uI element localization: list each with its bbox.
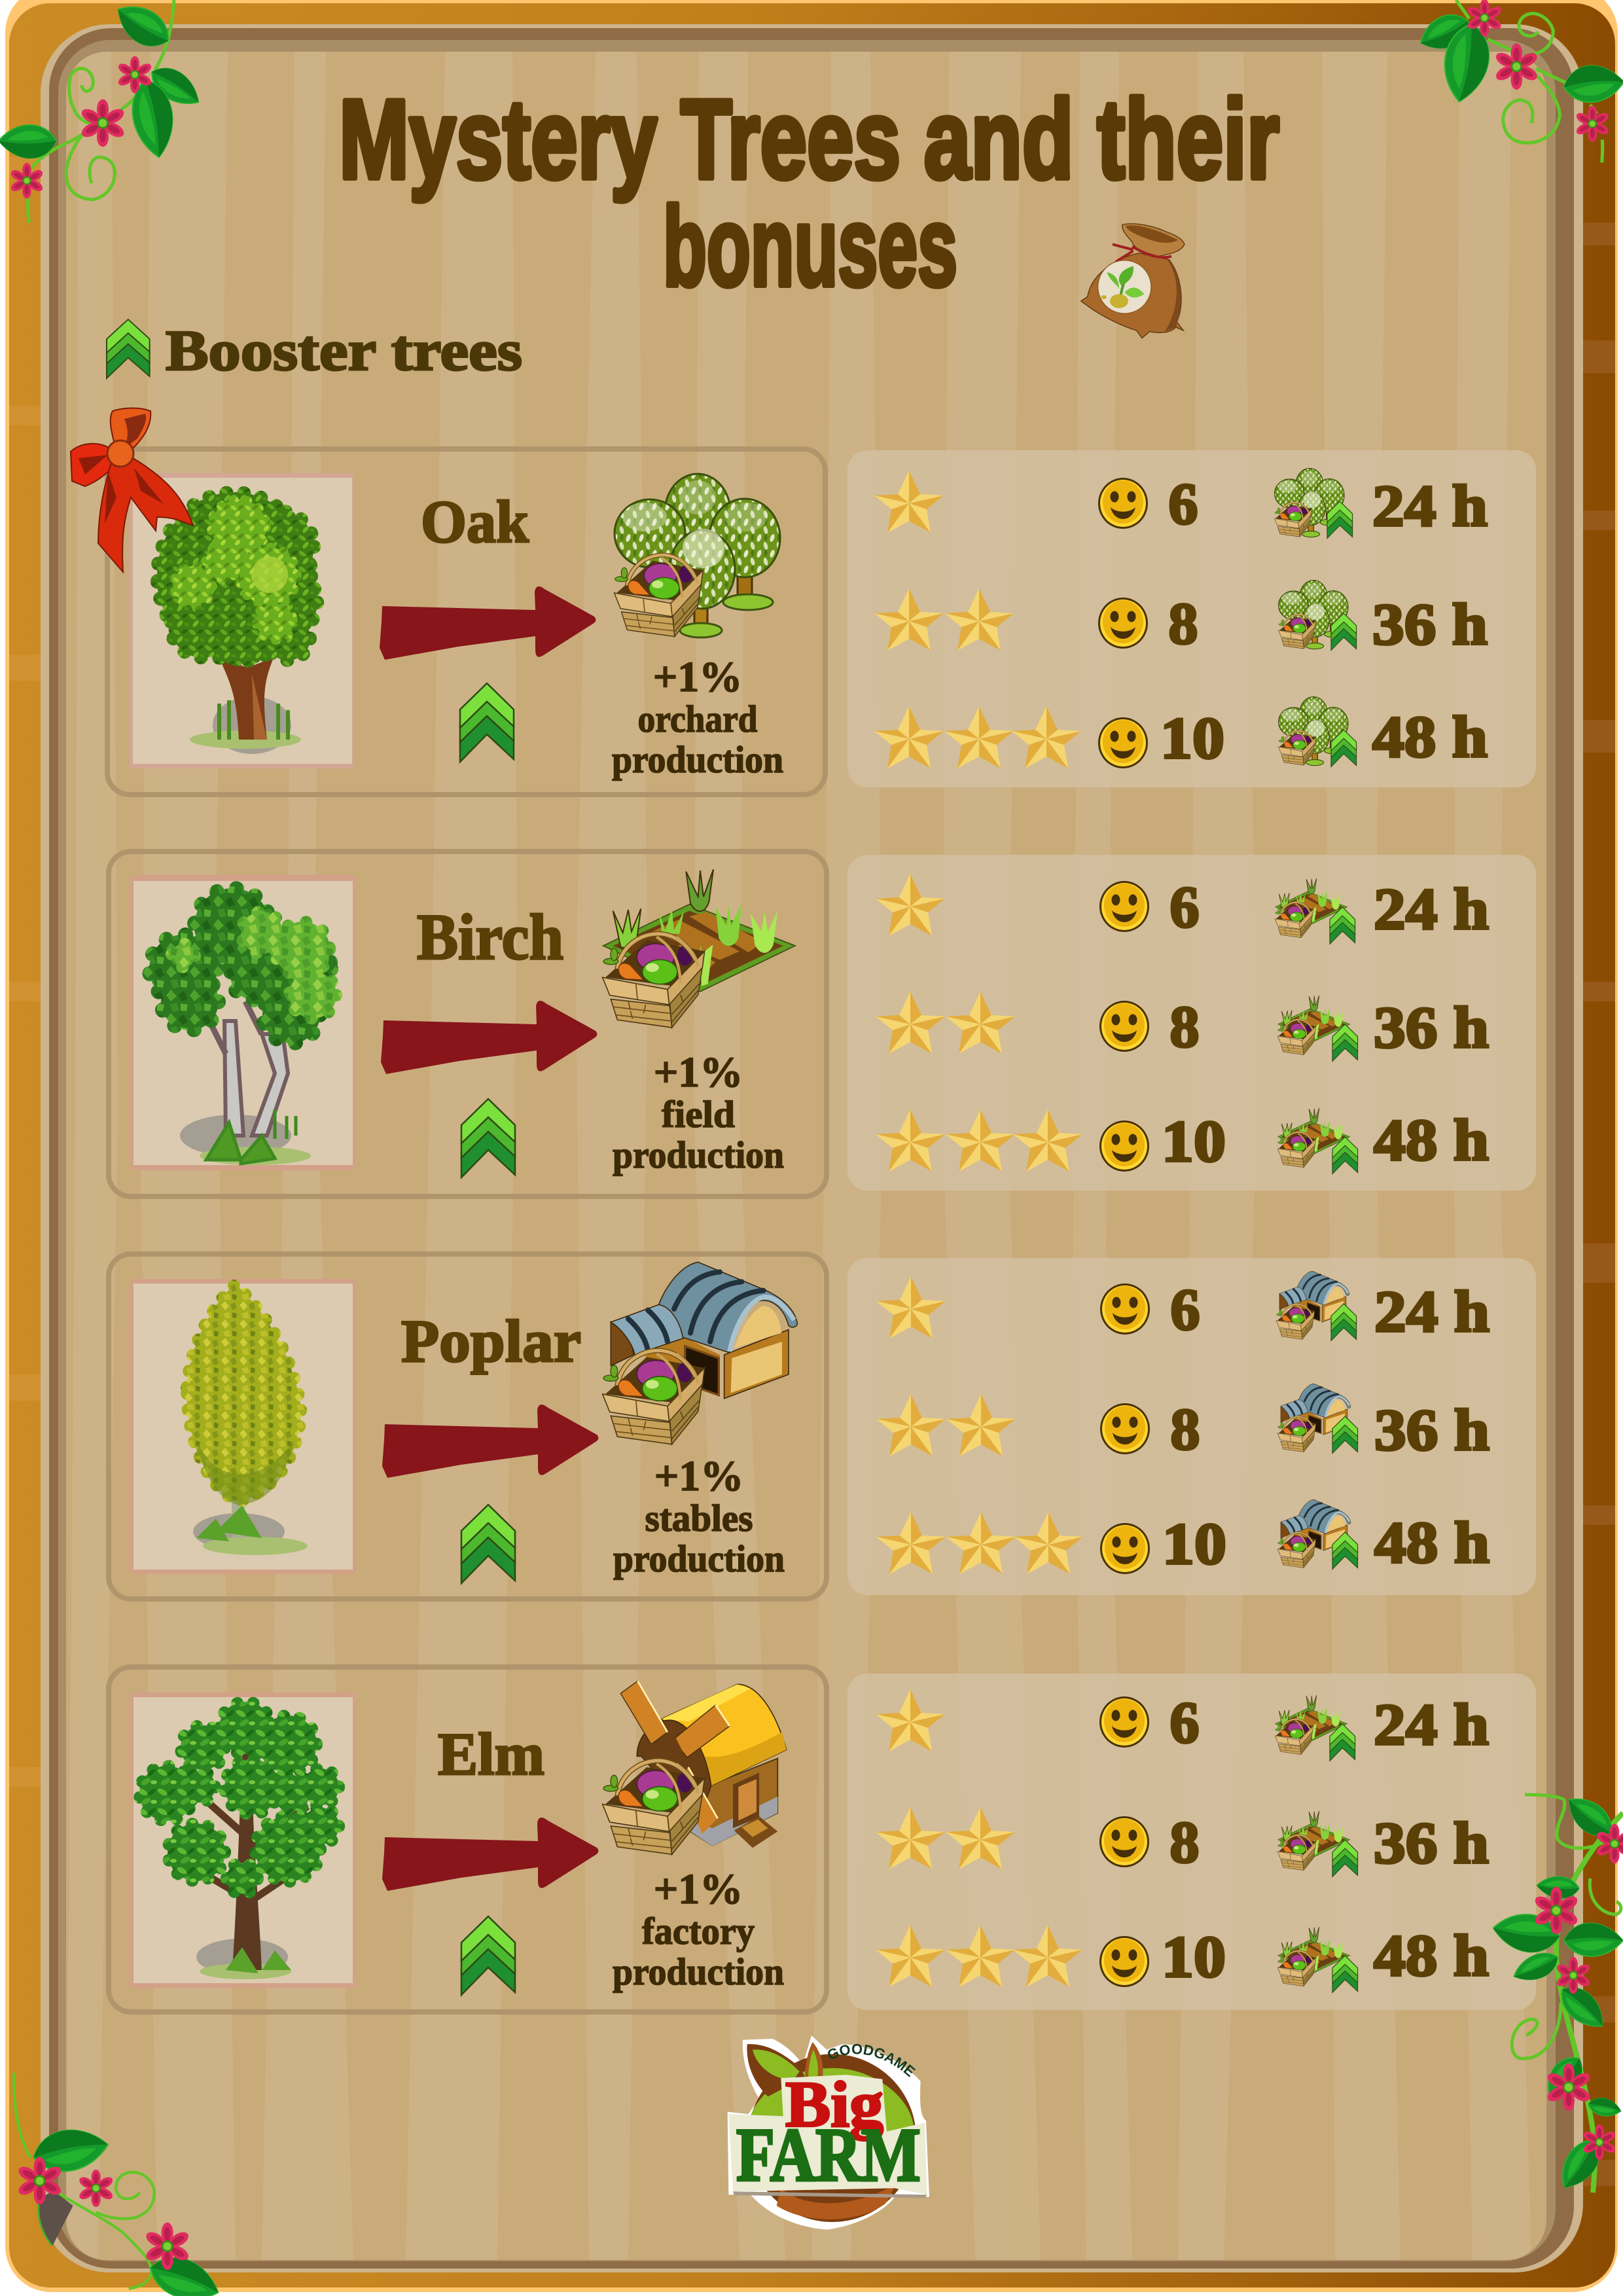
bonus text: [613, 1452, 785, 1580]
booster chevrons: [461, 1916, 515, 1995]
icon: windmill factory and basket: [603, 1681, 787, 1854]
bonus text: +1%: [654, 1865, 743, 1913]
heading: Poplar: Poplar: [401, 1308, 581, 1374]
arrow: [382, 1405, 598, 1478]
panel: birch stats: 6: [1170, 875, 1199, 940]
icon: field and basket: [603, 869, 795, 1028]
heading: Oak: Oak: [421, 488, 529, 555]
bonus text: production: [613, 1537, 785, 1580]
panel: elm stats: 36 h: [1374, 1811, 1489, 1876]
flowers: lower right vine: [1491, 1789, 1623, 2196]
arrow: [381, 1001, 597, 1074]
heading: Birch: Birch: [417, 901, 563, 973]
panel: birch stats: 36 h: [1374, 996, 1489, 1060]
booster chevrons: [461, 1505, 515, 1583]
panel: oak stats: 36 h: [1372, 592, 1488, 657]
panel: elm stats: 6: [1170, 1691, 1199, 1755]
panel: elm stats: [847, 1674, 1536, 2010]
logo: Goodgame Big Farm: FARM: [736, 2113, 921, 2198]
icon: red bow: [71, 408, 193, 572]
logo: Goodgame Big Farm: Big: [785, 2068, 883, 2140]
bonus text: +1%: [654, 1049, 743, 1096]
arrow: [382, 1818, 598, 1891]
bonus text: production: [613, 1950, 784, 1993]
icon: stable and basket: [603, 1262, 797, 1444]
arrow: [380, 586, 596, 660]
logo: Goodgame Big Farm: [728, 2036, 929, 2230]
heading: Elm: Elm: [438, 1721, 544, 1787]
panel: birch: [109, 852, 827, 1196]
panel: poplar stats: 36 h: [1374, 1398, 1489, 1463]
panel: birch stats: 8: [1170, 995, 1199, 1060]
panel: oak stats: 8: [1169, 592, 1198, 656]
corner flowers: top-right: [1414, 0, 1623, 162]
panel: poplar stats: 8: [1170, 1397, 1200, 1462]
panel: poplar stats: 24 h: [1374, 1280, 1489, 1344]
panel: oak stats: 48 h: [1372, 705, 1488, 770]
icon: seed bag: [1081, 224, 1185, 338]
panel: birch stats: 10: [1162, 1109, 1226, 1174]
panel: oak stats: 6: [1169, 472, 1198, 537]
panel: poplar stats: 6: [1170, 1278, 1200, 1342]
panel: poplar stats: [847, 1258, 1536, 1595]
title: [339, 77, 1279, 310]
bonus text: factory: [642, 1910, 755, 1952]
panel: elm stats: 8: [1170, 1810, 1199, 1875]
legend: booster trees: Booster trees: [166, 319, 522, 383]
picture: poplar tree: [130, 1279, 355, 1574]
corner flowers: bottom-left: [14, 2073, 225, 2296]
panel: oak stats: [847, 450, 1536, 787]
panel: elm stats: 10: [1162, 1925, 1226, 1990]
bonus text: orchard: [637, 698, 758, 740]
bonus text: +1%: [654, 1452, 743, 1500]
bonus text: [613, 1049, 784, 1176]
panel: poplar stats: 48 h: [1374, 1511, 1489, 1575]
picture: birch tree: [130, 875, 355, 1170]
panel: birch stats: [847, 855, 1536, 1191]
booster chevrons: [460, 683, 514, 762]
bonus text: [612, 653, 783, 781]
bonus text: field: [662, 1093, 735, 1136]
panel: oak stats: 10: [1160, 706, 1224, 771]
bonus text: [613, 1865, 784, 1993]
panel: elm stats: 24 h: [1374, 1693, 1489, 1757]
booster chevrons: [461, 1099, 515, 1177]
picture: oak tree: [130, 473, 353, 768]
bonus text: production: [613, 1134, 784, 1176]
icon: orchard and basket: [615, 474, 780, 637]
corner flowers: top-left: [0, 0, 207, 223]
title: Mystery Trees and their: [339, 77, 1279, 202]
panel: oak stats: 24 h: [1372, 474, 1488, 539]
picture: elm tree: [130, 1693, 355, 1988]
title: bonuses: [663, 184, 957, 310]
panel: birch stats: 24 h: [1374, 877, 1489, 942]
panel: elm: [109, 1667, 827, 2012]
bonus text: production: [612, 738, 783, 781]
panel: elm stats: 48 h: [1374, 1924, 1489, 1988]
bonus text: +1%: [653, 653, 742, 701]
panel: birch stats: 48 h: [1374, 1108, 1489, 1173]
logo: Goodgame Big Farm: GOODGAME: [828, 2043, 916, 2077]
panel: oak: [107, 449, 825, 795]
panel: poplar stats: 10: [1162, 1512, 1226, 1577]
bonus text: stables: [645, 1497, 753, 1539]
panel: poplar: [109, 1254, 827, 1599]
